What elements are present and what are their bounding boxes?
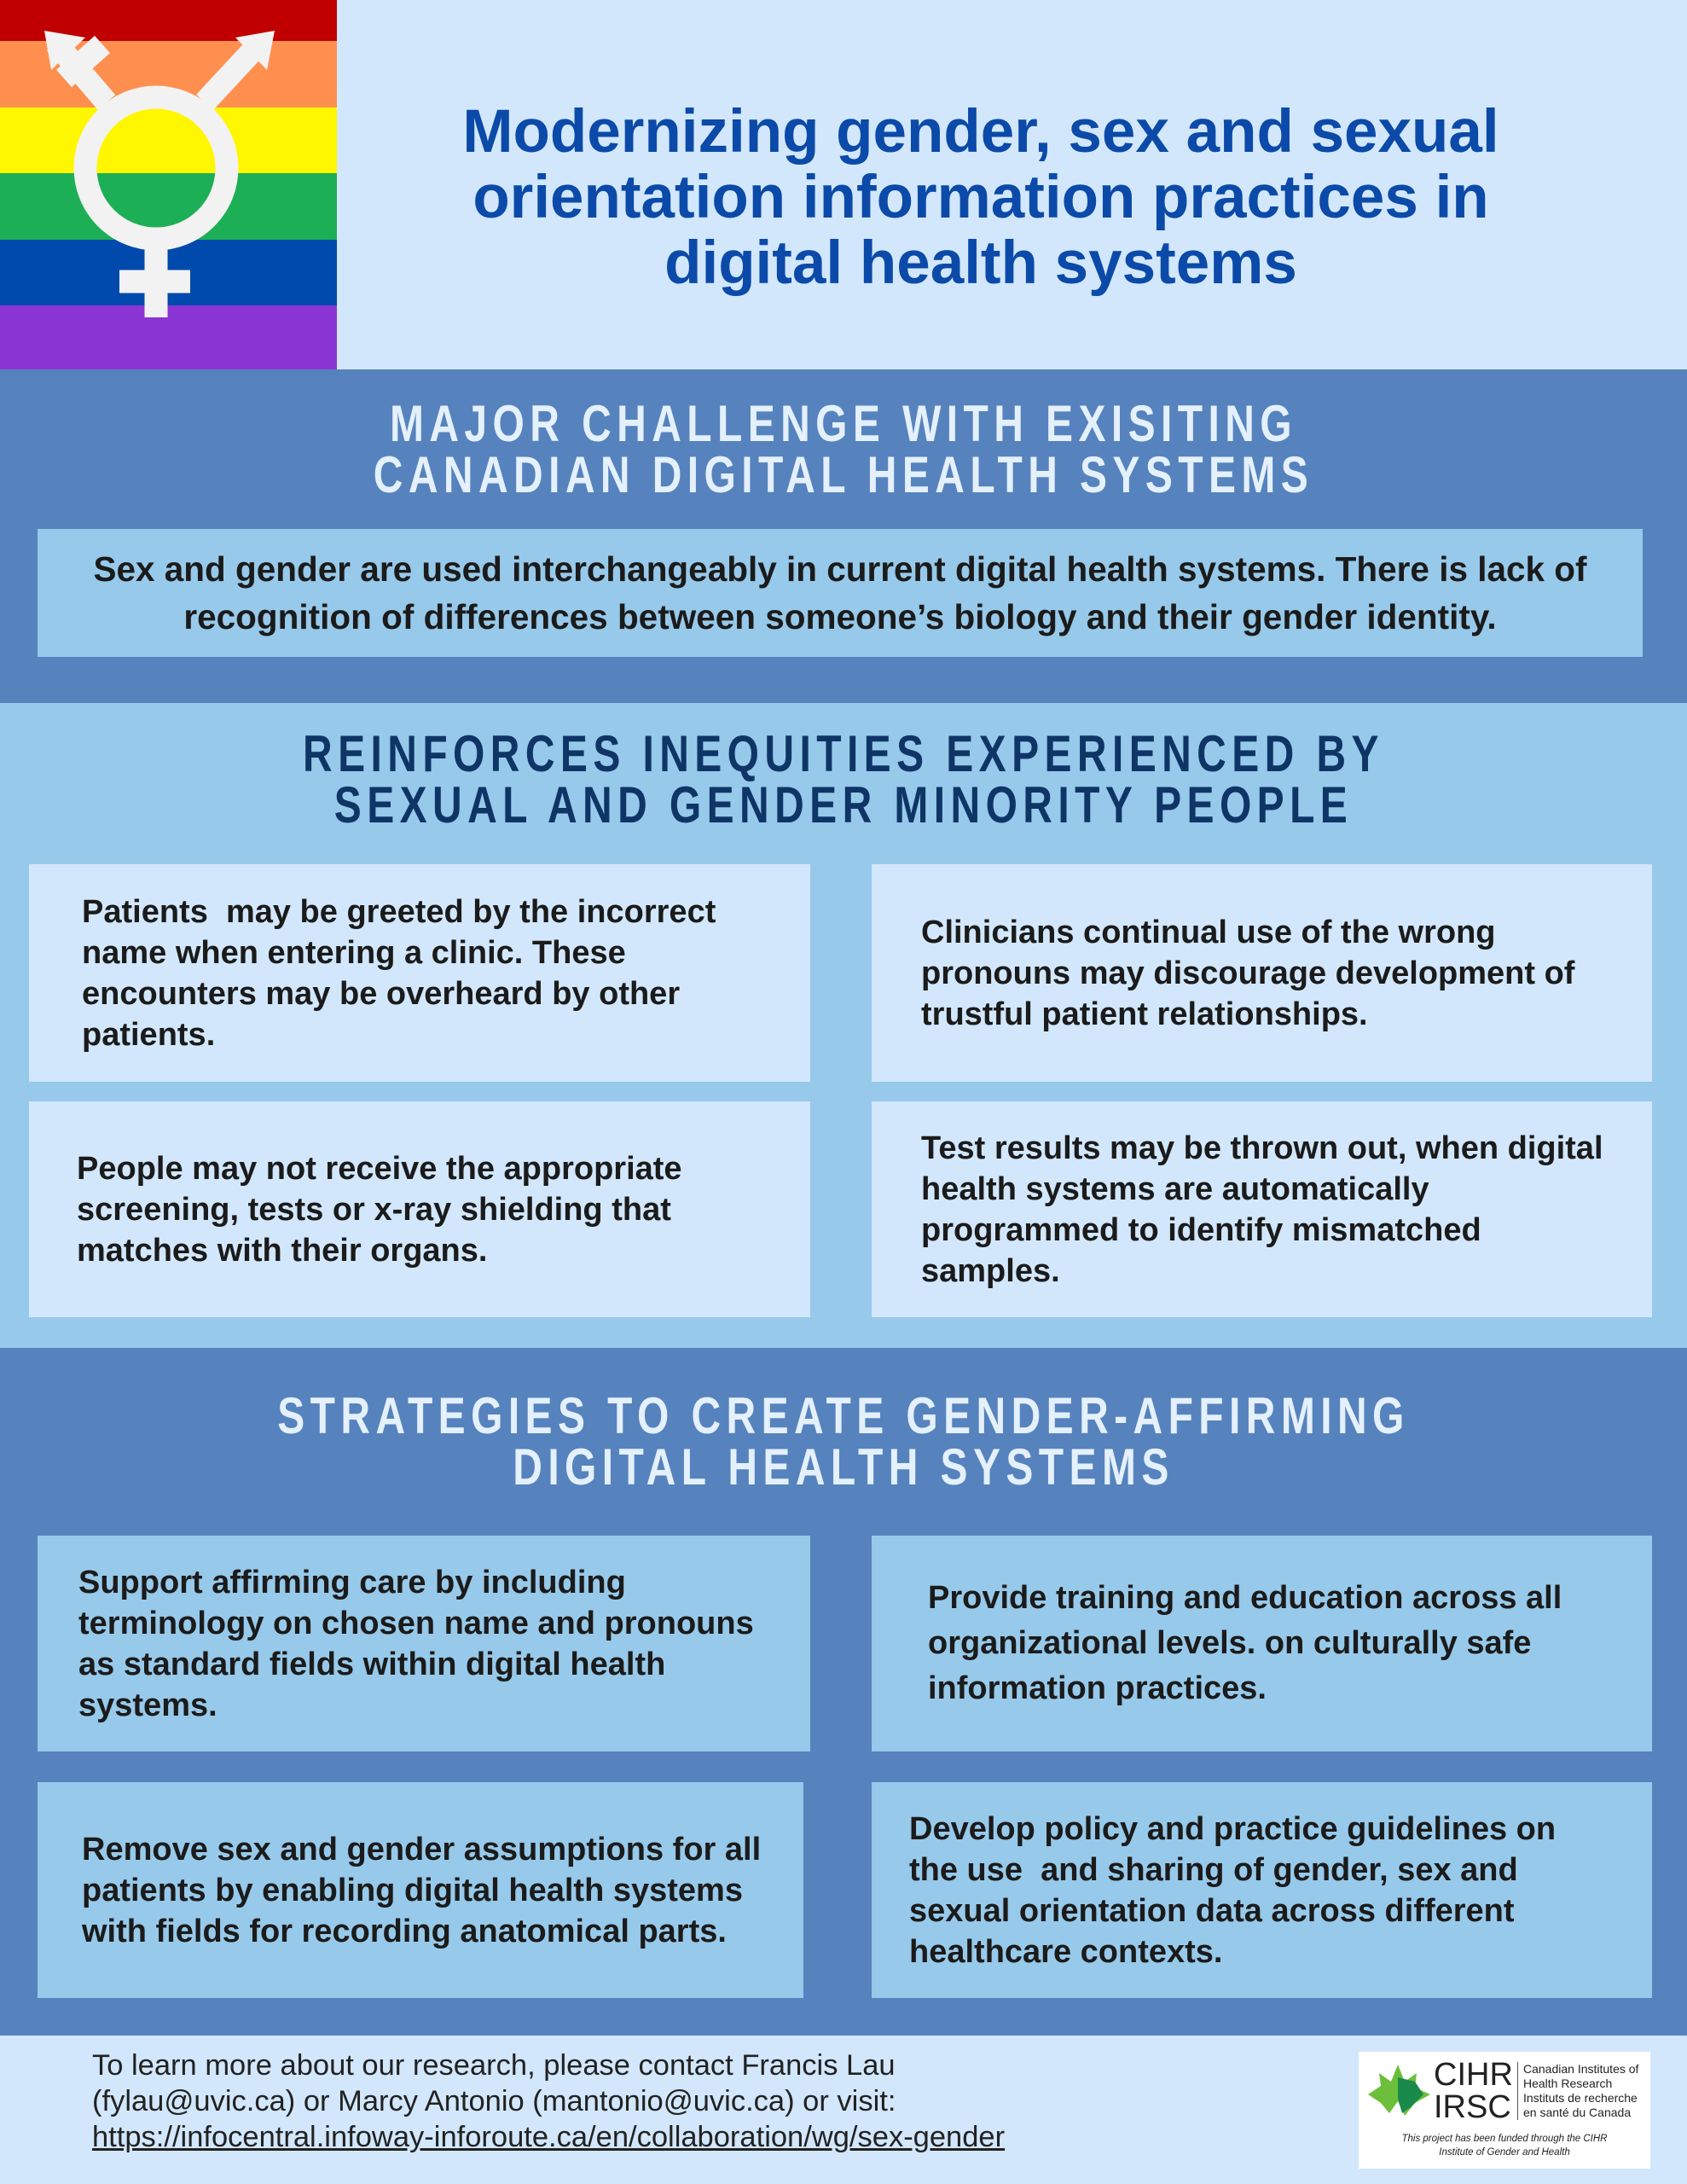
title: digital health systems	[664, 229, 1297, 297]
panel: inequities	[0, 703, 1687, 1348]
icon: rainbow flag with transgender symbol	[0, 0, 337, 369]
footer: contact text: https://infocentral.infoway-inforoute.ca/en/collaboration/wg/sex-gender	[92, 2121, 1005, 2153]
box: remove assumptions: with fields for recording anatomical parts.	[82, 1913, 727, 1949]
box: remove assumptions	[38, 1782, 803, 1998]
title: orientation information practices in	[472, 164, 1489, 231]
box: policy: the use and sharing of gender, sex and	[909, 1851, 1518, 1887]
panel: strategies	[0, 1348, 1687, 2036]
box: incorrect name: patients.	[82, 1017, 215, 1053]
heading: strategies: DIGITAL HEALTH SYSTEMS	[513, 1438, 1174, 1496]
box: incorrect name: encounters may be overheard by other	[82, 976, 680, 1012]
box: incorrect name	[29, 864, 810, 1082]
box: wrong pronouns: trustful patient relationships.	[921, 996, 1368, 1032]
title	[462, 98, 1499, 297]
logo: CIHR: Instituts de recherche	[1523, 2091, 1638, 2105]
heading: strategies	[277, 1387, 1410, 1496]
logo: CIHR: Institute of Gender and Health	[1439, 2147, 1570, 2158]
box: test results: health systems are automatically	[921, 1170, 1429, 1206]
box: test results: Test results may be thrown out, when digital	[921, 1130, 1603, 1165]
heading: inequities	[303, 725, 1384, 834]
logo: CIHR: This project has been funded through the CIHR	[1401, 2134, 1607, 2144]
heading: major challenge	[374, 395, 1313, 503]
icon: maple leaf	[1368, 2065, 1430, 2116]
box: training: information practices.	[928, 1670, 1267, 1706]
box: affirming care: systems.	[78, 1687, 217, 1723]
box: training: organizational levels. on culturally safe	[928, 1625, 1531, 1661]
box: affirming care	[38, 1536, 810, 1751]
footer: contact text: (fylau@uvic.ca) or Marcy Antonio (mantonio@uvic.ca) or visit:	[92, 2085, 896, 2117]
footer: contact text: To learn more about our research, please contact Francis Lau	[92, 2049, 896, 2082]
heading: inequities: SEXUAL AND GENDER MINORITY PEOPLE	[334, 776, 1353, 834]
box: test results: programmed to identify mismatched	[921, 1211, 1481, 1247]
box: screening: People may not receive the appropriate	[77, 1150, 682, 1186]
box: affirming care: terminology on chosen name and pronouns	[78, 1606, 754, 1641]
box: policy: Develop policy and practice guidelines on	[909, 1810, 1556, 1846]
text block: challenge: Sex and gender are used interchangeably in current digital health systems. There is lack of	[93, 549, 1587, 589]
logo: CIHR	[1359, 2052, 1650, 2169]
box: screening	[29, 1101, 810, 1317]
box: training: Provide training and education across all	[928, 1580, 1562, 1616]
box: policy: sexual orientation data across different	[909, 1892, 1515, 1928]
box: policy	[872, 1782, 1652, 1998]
box: screening: screening, tests or x-ray shielding that	[77, 1191, 671, 1227]
logo: CIHR: CIHR	[1434, 2057, 1513, 2093]
title: Modernizing gender, sex and sexual	[462, 98, 1499, 166]
box: screening: matches with their organs.	[77, 1232, 487, 1268]
text block: challenge: recognition of differences between someone’s biology and their gender identity.	[183, 597, 1497, 636]
box: training	[872, 1536, 1652, 1751]
box: test results	[872, 1101, 1652, 1317]
logo: CIHR: en santé du Canada	[1523, 2106, 1631, 2119]
box: policy: healthcare contexts.	[909, 1933, 1222, 1969]
box: remove assumptions: patients by enabling digital health systems	[82, 1872, 743, 1908]
logo: CIHR: Canadian Institutes of	[1523, 2062, 1638, 2076]
box: test results: samples.	[921, 1252, 1060, 1288]
box: wrong pronouns	[872, 864, 1652, 1082]
box: incorrect name: name when entering a clinic. These	[82, 935, 626, 971]
logo: CIHR: Health Research	[1523, 2077, 1612, 2090]
heading: major challenge: CANADIAN DIGITAL HEALTH SYSTEMS	[374, 446, 1313, 503]
box: wrong pronouns: pronouns may discourage development of	[921, 956, 1574, 991]
footer: contact text	[92, 2049, 1005, 2153]
heading: major challenge: MAJOR CHALLENGE WITH EXISITING	[390, 395, 1297, 452]
panel: major challenge	[0, 369, 1687, 703]
heading: inequities: REINFORCES INEQUITIES EXPERIENCED BY	[303, 725, 1384, 782]
box: wrong pronouns: Clinicians continual use of the wrong	[921, 915, 1496, 950]
box: affirming care: as standard fields within digital health	[78, 1647, 665, 1682]
box: remove assumptions: Remove sex and gender assumptions for all	[82, 1831, 761, 1867]
box: affirming care: Support affirming care by including	[78, 1565, 626, 1600]
box: incorrect name: Patients may be greeted by the incorrect	[82, 894, 716, 930]
heading: strategies: STRATEGIES TO CREATE GENDER-AFFIRMING	[277, 1387, 1410, 1444]
logo: CIHR: IRSC	[1434, 2089, 1511, 2125]
text block: challenge	[38, 529, 1643, 657]
